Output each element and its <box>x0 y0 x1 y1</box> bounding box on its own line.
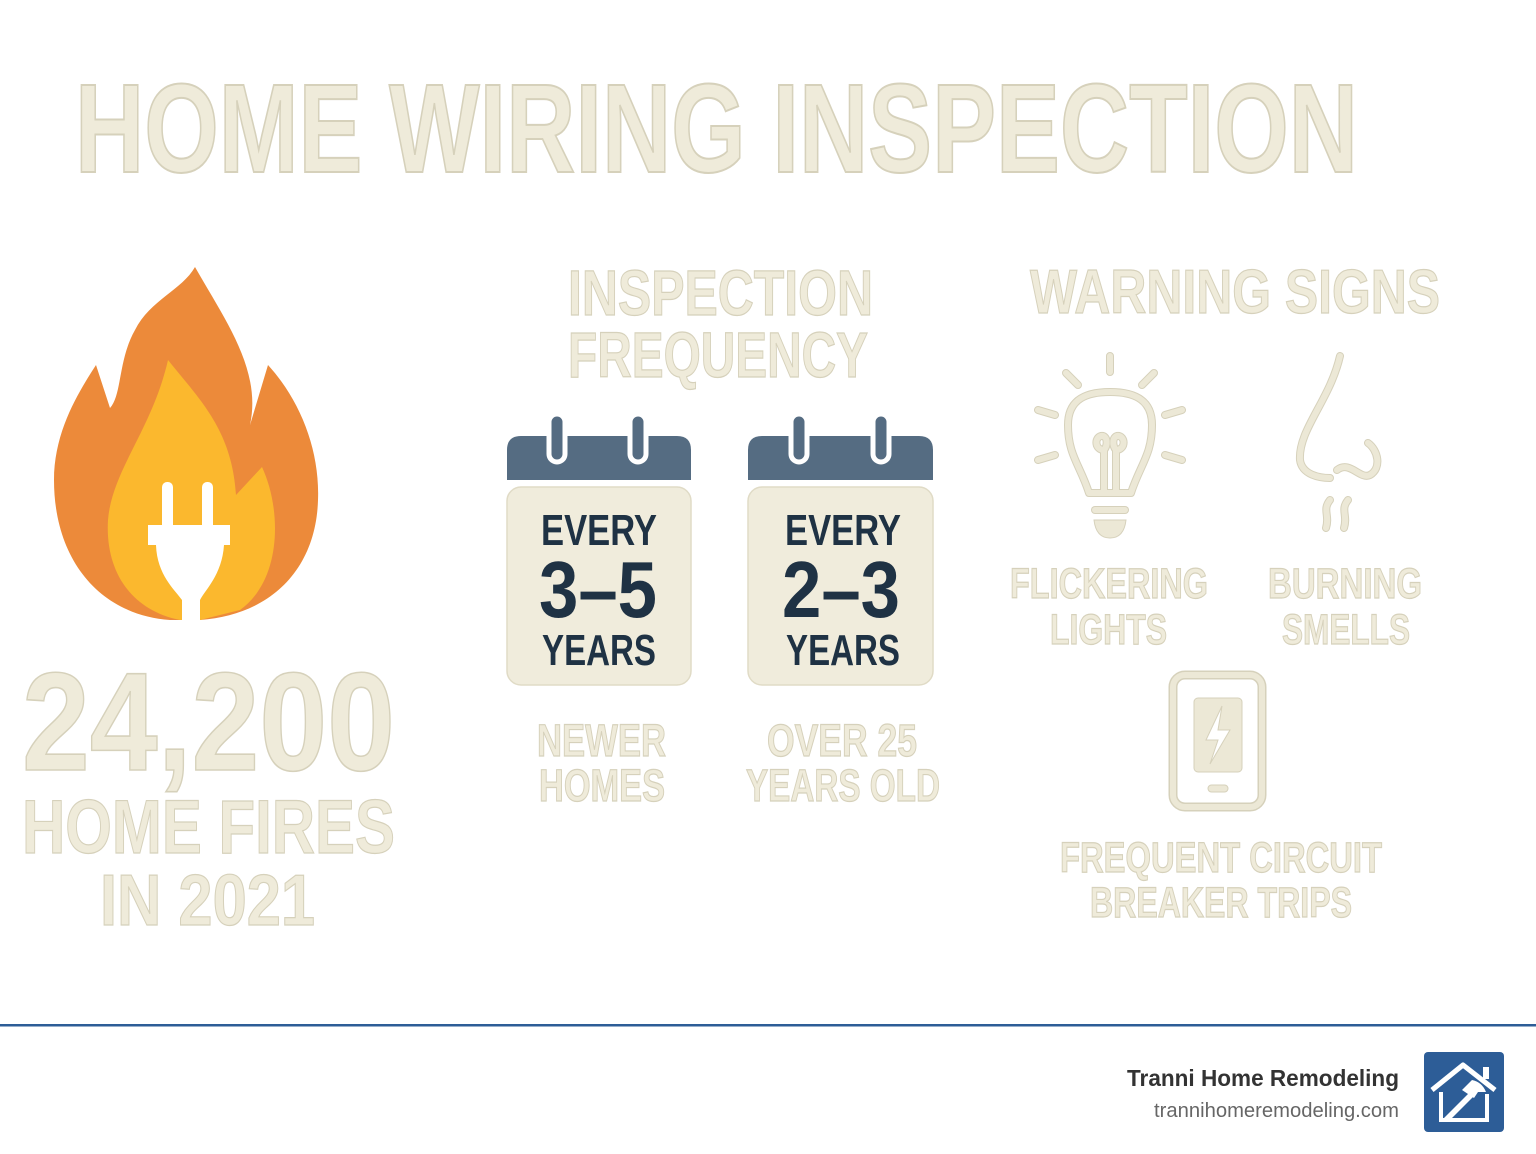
panel: warning signs <box>1010 258 1440 927</box>
icon: flame with plug <box>54 267 318 620</box>
calendar: every 3-5 years: YEARS <box>542 626 656 675</box>
footer: brand text: Tranni Home Remodeling <box>1127 1065 1399 1091</box>
calendar: every 3-5 years <box>507 414 691 685</box>
label: over 25 years old: OVER 25 <box>767 715 917 766</box>
calendar: every 2-3 years: 2–3 <box>782 545 900 634</box>
label: flickering lights: LIGHTS <box>1050 606 1167 654</box>
calendar: every 2-3 years: YEARS <box>786 626 900 675</box>
footer: brand text <box>1127 1065 1399 1122</box>
heading: inspection frequency: INSPECTION <box>568 257 873 329</box>
calendar: every 3-5 years: EVERY <box>541 506 657 555</box>
icon: phone with bolt <box>1173 675 1262 807</box>
label: newer homes: HOMES <box>539 760 665 811</box>
icon: logo house with hammer <box>1424 1052 1504 1132</box>
icon: light bulb <box>1038 356 1182 538</box>
footer divider <box>0 1024 1536 1026</box>
heading: inspection frequency <box>568 257 873 391</box>
label: flickering lights <box>1010 560 1208 654</box>
label: newer homes <box>537 715 666 811</box>
panel: home fires statistic <box>22 267 395 941</box>
heading: warning signs: WARNING SIGNS <box>1030 258 1440 327</box>
calendar: every 2-3 years <box>748 414 933 685</box>
label: burning smells: BURNING <box>1268 560 1422 608</box>
label: over 25 years old <box>746 715 940 811</box>
calendar: every 2-3 years: EVERY <box>785 506 901 555</box>
label: burning smells: SMELLS <box>1282 606 1410 654</box>
panel: inspection frequency <box>507 257 940 811</box>
heading: inspection frequency: FREQUENCY <box>568 319 868 391</box>
icon: nose <box>1300 356 1377 528</box>
footer: brand text: trannihomeremodeling.com <box>1154 1100 1399 1122</box>
label: flickering lights: FLICKERING <box>1010 560 1208 608</box>
stat label <box>22 785 395 941</box>
stat label: HOME FIRES <box>22 785 395 870</box>
label: newer homes: NEWER <box>537 715 666 766</box>
label: over 25 years old: YEARS OLD <box>746 760 940 811</box>
label: frequent circuit breaker trips <box>1060 834 1382 927</box>
label: burning smells <box>1268 560 1422 654</box>
label: frequent circuit breaker trips: FREQUENT CIRCUIT <box>1060 834 1382 882</box>
calendar: every 3-5 years: 3–5 <box>539 545 657 634</box>
stat number: 24,200 <box>22 643 395 800</box>
label: frequent circuit breaker trips: BREAKER TRIPS <box>1090 879 1352 927</box>
stat label: IN 2021 <box>100 861 315 941</box>
